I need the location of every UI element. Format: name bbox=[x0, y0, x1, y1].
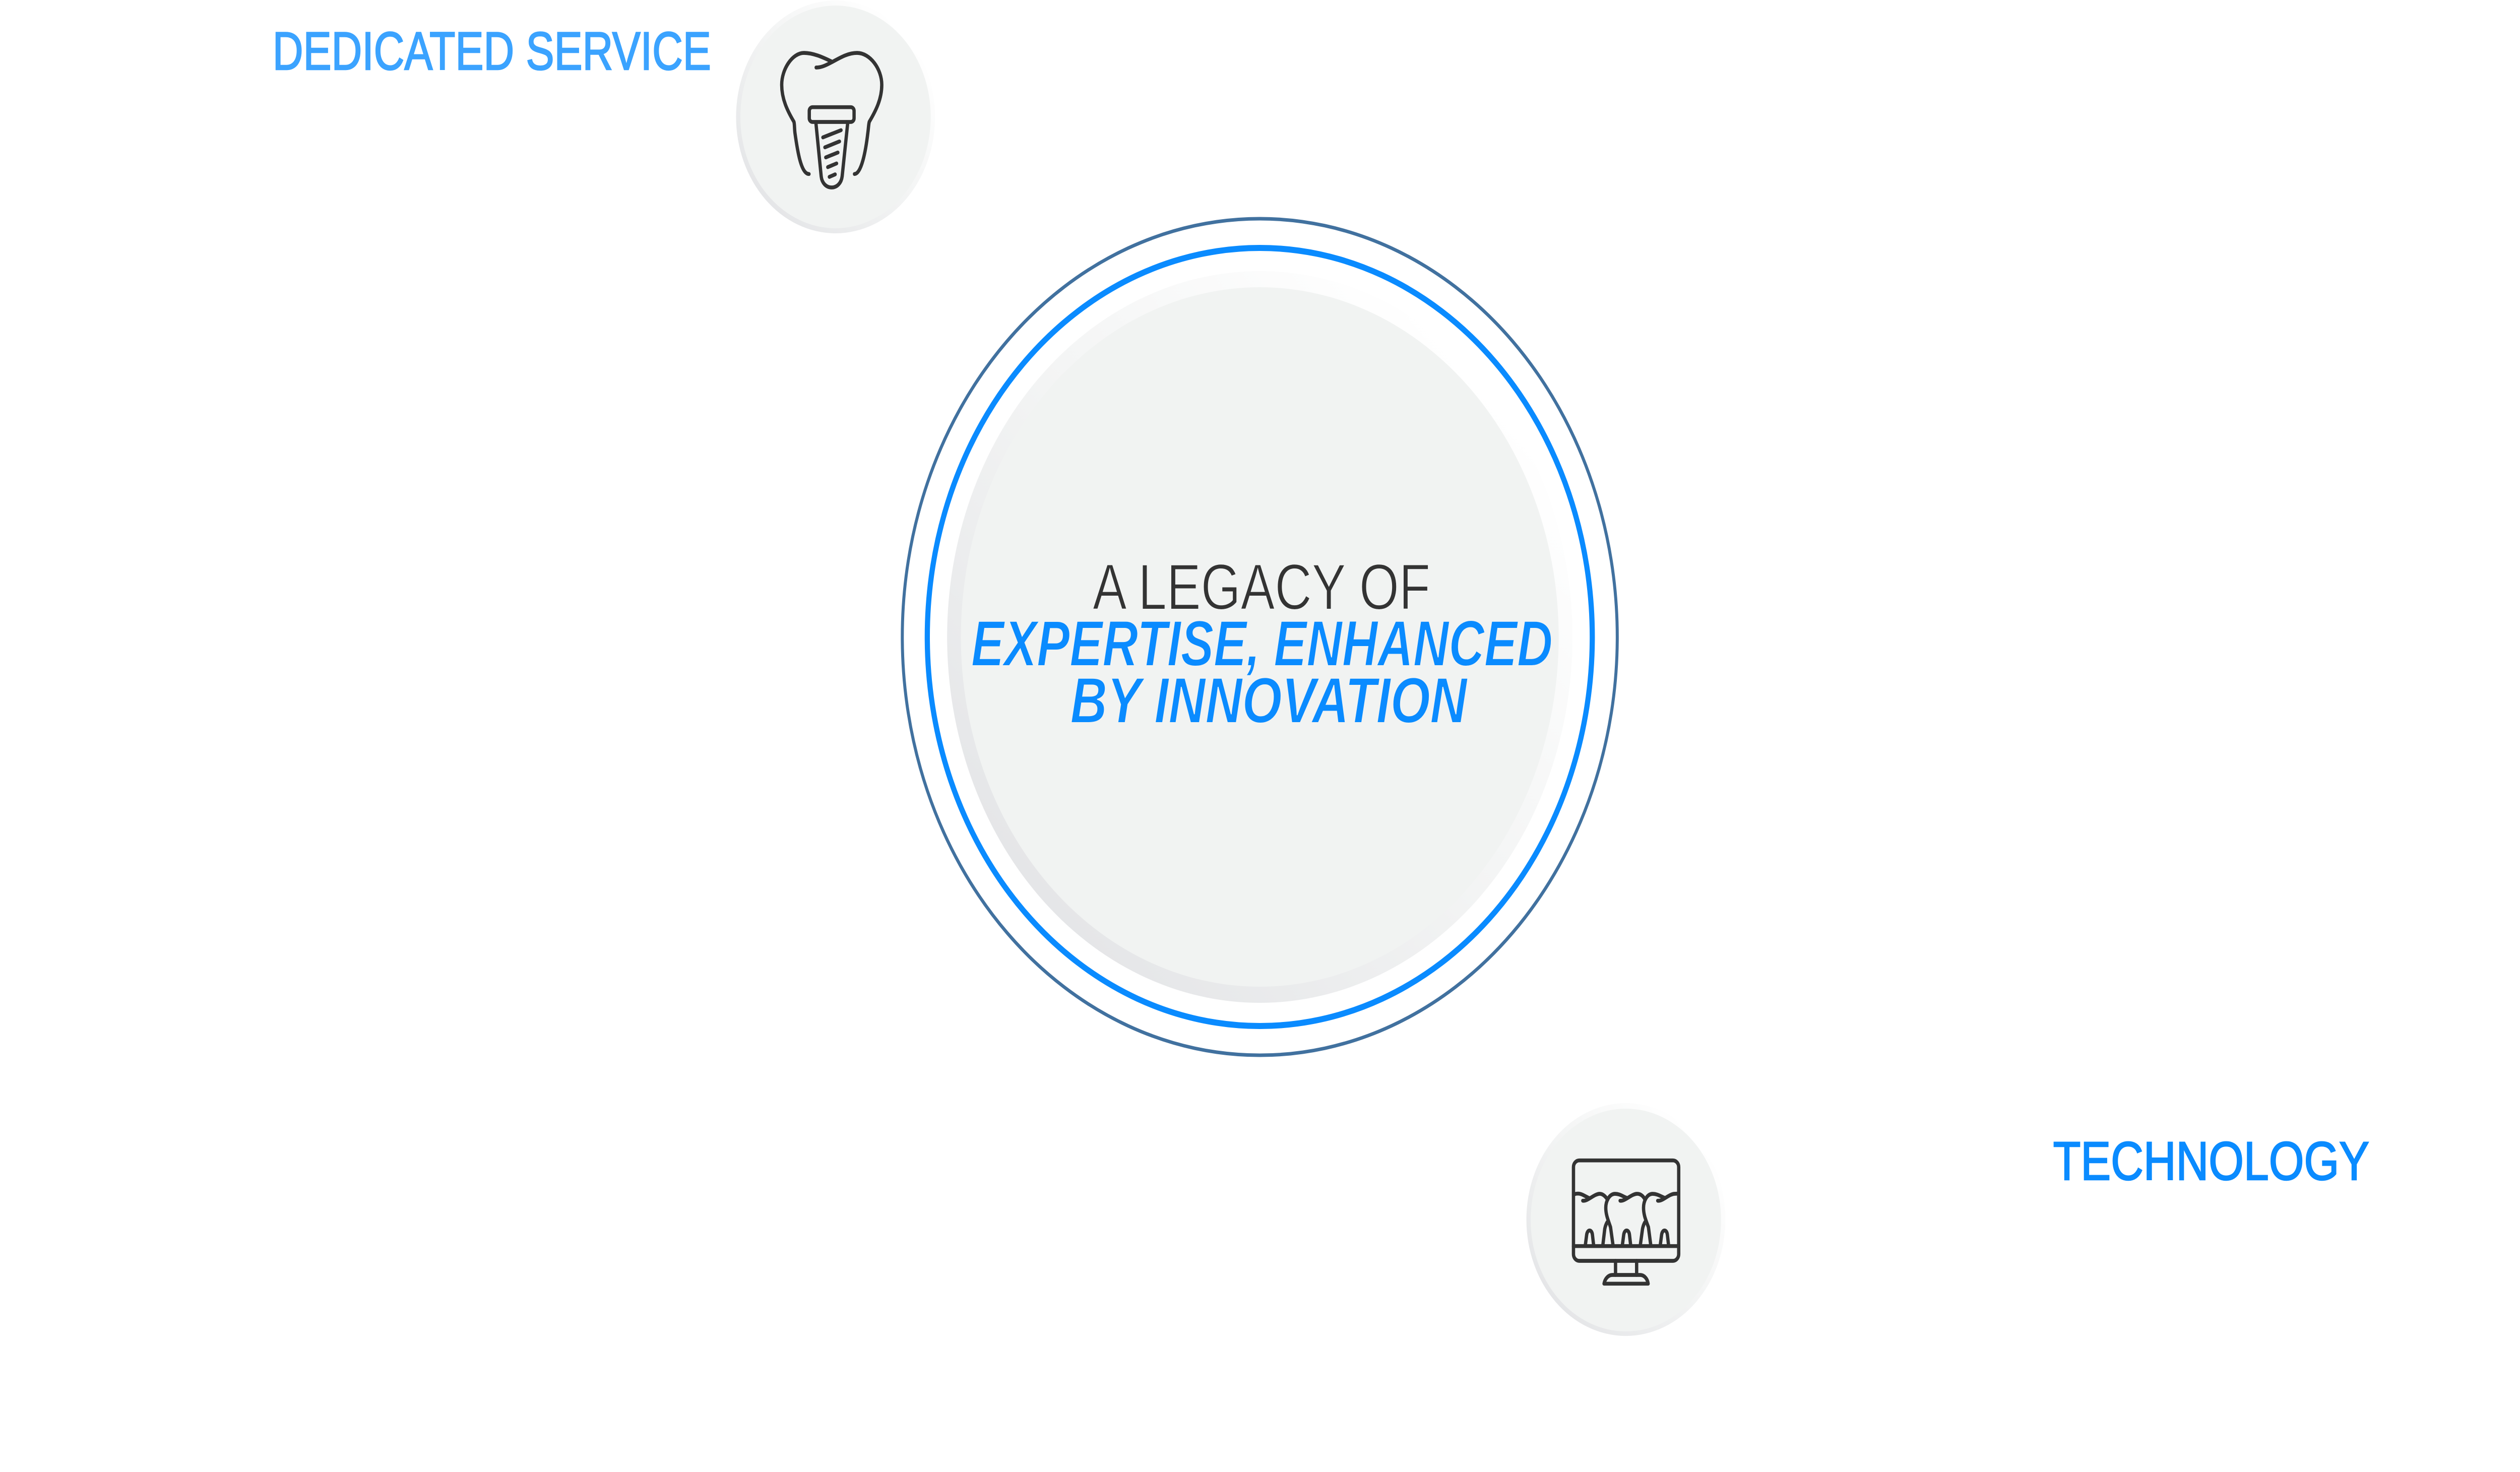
disc rim bbox=[947, 271, 1572, 1003]
badge face bbox=[1531, 1109, 1721, 1331]
panel: central circle bbox=[902, 219, 1617, 1055]
badge face bbox=[740, 6, 931, 228]
badge rim bbox=[1527, 1103, 1725, 1336]
label: technology: TECHNOLOGY bbox=[2053, 1131, 2369, 1192]
icon: dental implant in tooth badge bbox=[736, 1, 935, 233]
blue ring bbox=[927, 248, 1592, 1026]
label: dedicated service: DEDICATED SERVICE bbox=[273, 21, 711, 82]
icon: monitor with teeth badge bbox=[1527, 1103, 1725, 1336]
heading: expertise, enhanced: EXPERTISE, ENHANCED bbox=[971, 608, 1553, 680]
icon: monitor showing teeth bbox=[1573, 1161, 1679, 1284]
badge rim bbox=[736, 1, 935, 233]
icon: implant tooth outline bbox=[782, 53, 882, 187]
heading: by innovation: BY INNOVATION bbox=[1070, 665, 1468, 737]
heading: a legacy of: A LEGACY OF bbox=[1093, 551, 1430, 623]
disc face bbox=[961, 287, 1559, 987]
outer ring bbox=[902, 219, 1617, 1055]
